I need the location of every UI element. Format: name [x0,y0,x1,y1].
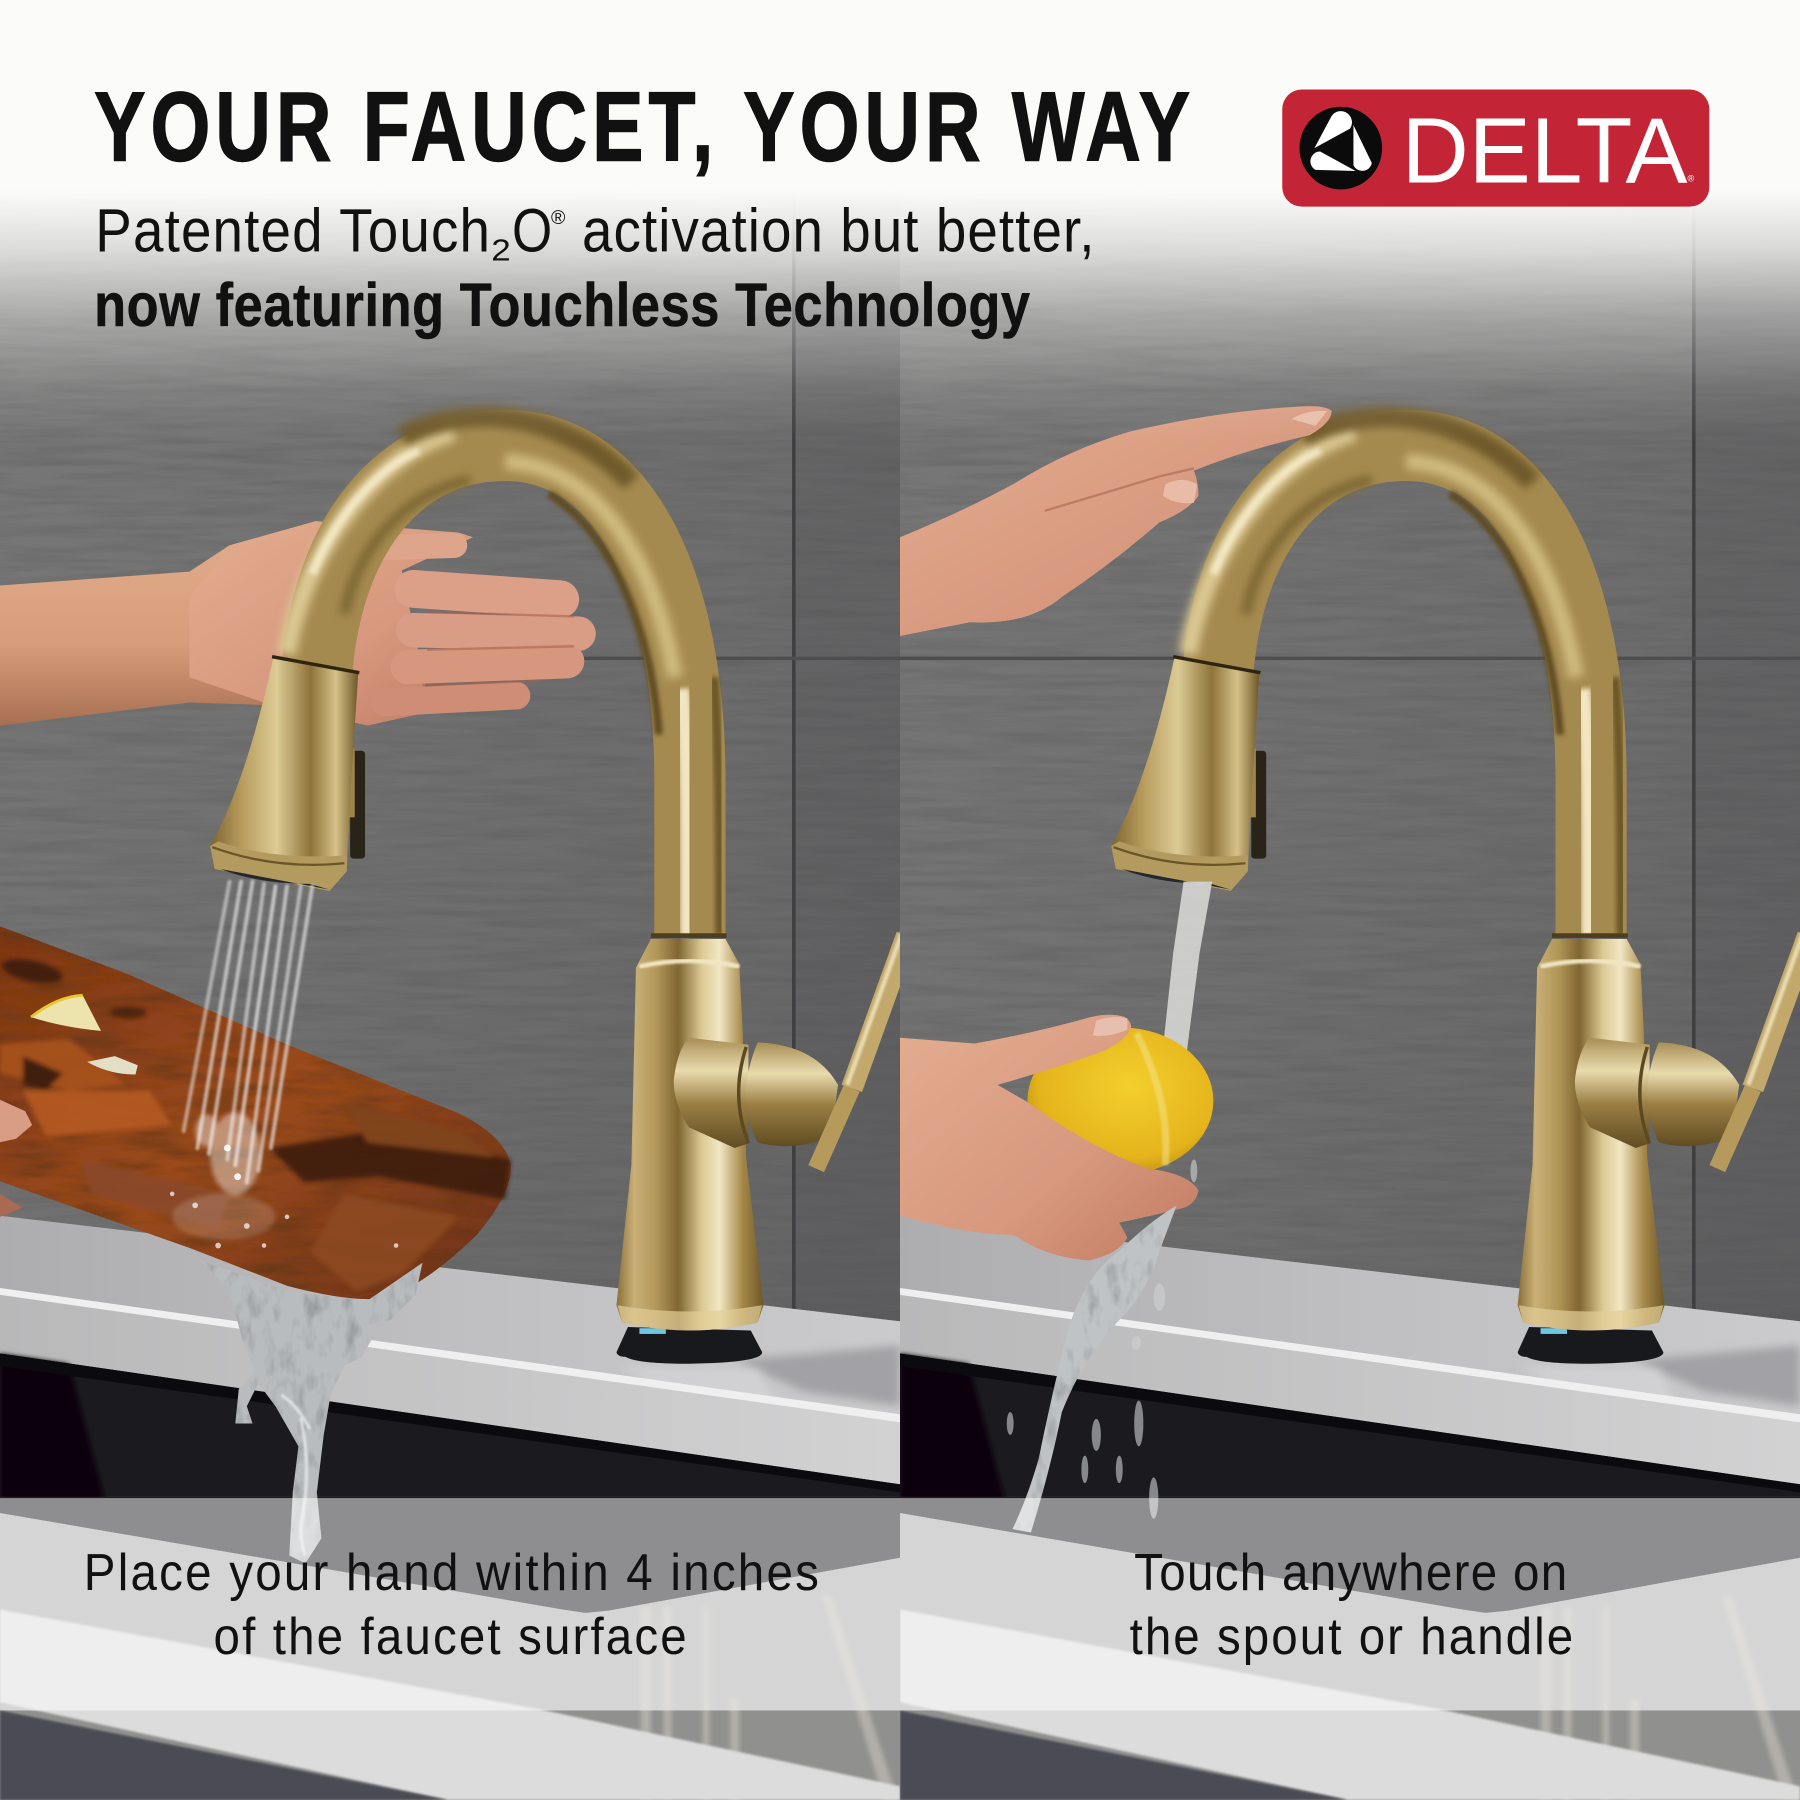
subtitle line 1: 2 [491,233,511,268]
logo: Delta [1282,90,1709,207]
top white fade [0,0,1800,442]
icon: hand hovering near faucet [0,521,579,726]
cutting board [0,926,511,1299]
logo: Delta: DELTA [1402,99,1688,203]
icon: Delta emblem [1299,107,1382,189]
water splash falling [1007,1159,1197,1533]
caption: right: Touch anywhere on [1134,1543,1567,1601]
water splash on board [170,1112,398,1248]
subtitle line 1 [95,196,1094,268]
subtitle line 1: O [512,196,552,264]
caption: right [1130,1543,1573,1666]
water spray [184,882,312,1182]
caption: right: the spout or handle [1130,1607,1573,1666]
caption band overlay [0,1498,1800,1710]
water cascade off board [201,1260,422,1564]
faucet: right [1111,417,1800,1364]
water stream [1164,882,1212,1050]
icon: hand touching spout [900,406,1332,636]
caption: left [84,1543,819,1666]
caption: left: Place your hand within 4 inches [84,1543,819,1601]
faucet: left [210,417,907,1364]
icon: hand holding lemon [900,1015,1198,1260]
logo: Delta: ® [1688,173,1695,183]
fingers holding the board [0,1100,32,1217]
title: YOUR FAUCET, YOUR WAY [94,72,1190,182]
lemon pieces [31,995,138,1074]
subtitle line 1: Patented Touch [95,198,490,265]
panel: left demonstration photo [0,201,900,1800]
subtitle line 1: ® [551,207,566,229]
panel: right demonstration photo [900,204,1800,1800]
subtitle line 1: activation but better, [582,198,1094,265]
caption: left: of the faucet surface [214,1607,687,1666]
lemon [1027,1027,1213,1174]
subtitle line 2: now featuring Touchless Technology [94,272,1030,340]
